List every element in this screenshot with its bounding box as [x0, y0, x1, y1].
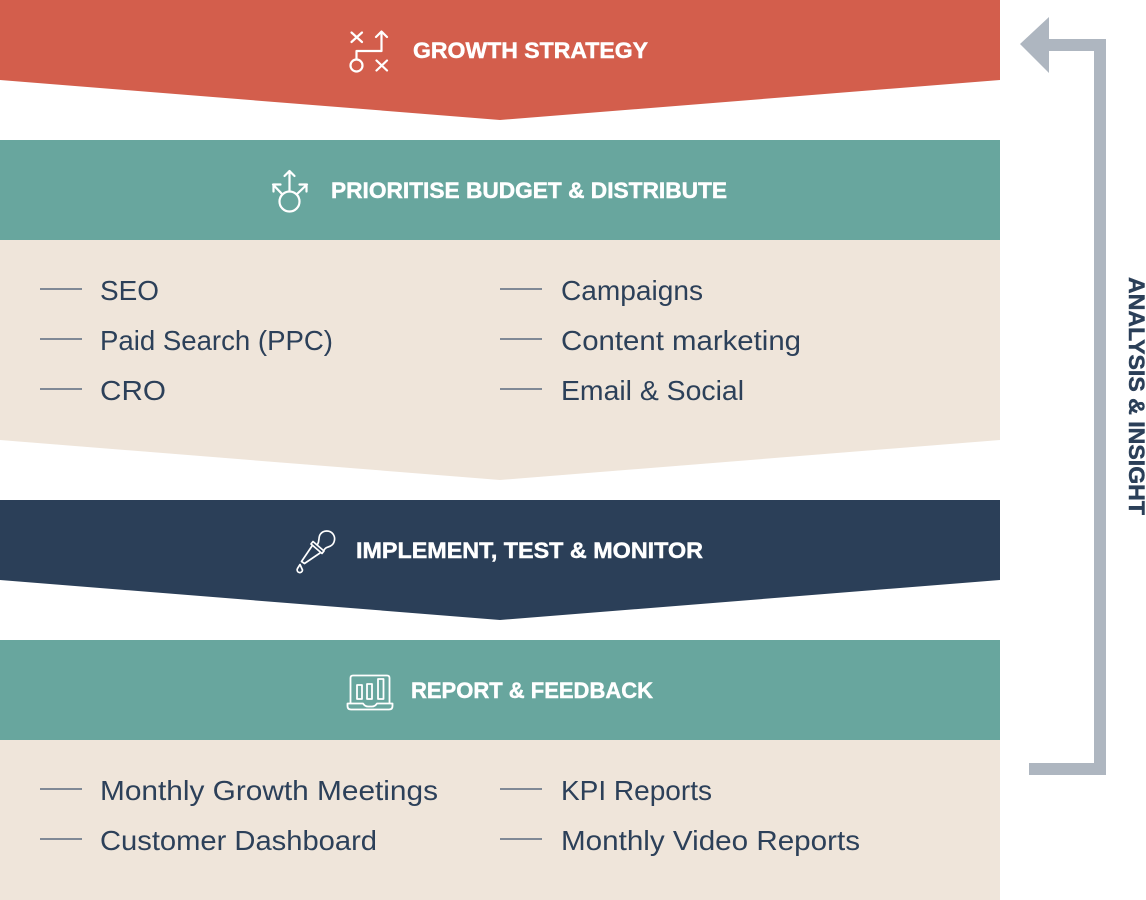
panel: growth strategy: [0, 0, 1000, 120]
list item: CRO: CRO: [100, 375, 166, 406]
icon: strategy play: [350, 32, 387, 72]
list item: Customer Dashboard: Customer Dashboard: [100, 825, 377, 856]
list item: CRO: [40, 375, 166, 406]
arrow: feedback loop: [1020, 17, 1106, 775]
icon: distribute arrows: [273, 171, 307, 212]
list item: SEO: SEO: [100, 275, 159, 306]
panel: channels list: [0, 240, 1000, 480]
heading: prioritise budget: PRIORITISE BUDGET & DISTRIBUTE: [331, 178, 727, 203]
list item: Content marketing: Content marketing: [561, 325, 801, 356]
list item: KPI Reports: KPI Reports: [561, 775, 712, 806]
panel: implement test monitor: [0, 500, 1000, 620]
panel: prioritise budget header: [0, 140, 1000, 240]
panel: report and feedback header: [0, 640, 1000, 740]
list item: Paid Search: Paid Search (PPC): [100, 325, 333, 356]
list item: Monthly Video Reports: Monthly Video Reports: [561, 825, 860, 856]
heading: growth strategy: GROWTH STRATEGY: [413, 38, 648, 63]
list item: Monthly Growth Meetings: Monthly Growth Meetings: [100, 775, 438, 806]
panel: reports list: [0, 740, 1000, 900]
list item: SEO: [40, 275, 159, 306]
heading: report and feedback: REPORT & FEEDBACK: [411, 678, 653, 703]
list item: Campaigns: Campaigns: [561, 275, 703, 306]
icon: pipette: [297, 531, 335, 573]
list item: Email & Social: Email & Social: [561, 375, 744, 406]
icon: laptop chart: [348, 676, 392, 710]
heading: implement test monitor: IMPLEMENT, TEST & MONITOR: [356, 538, 703, 563]
